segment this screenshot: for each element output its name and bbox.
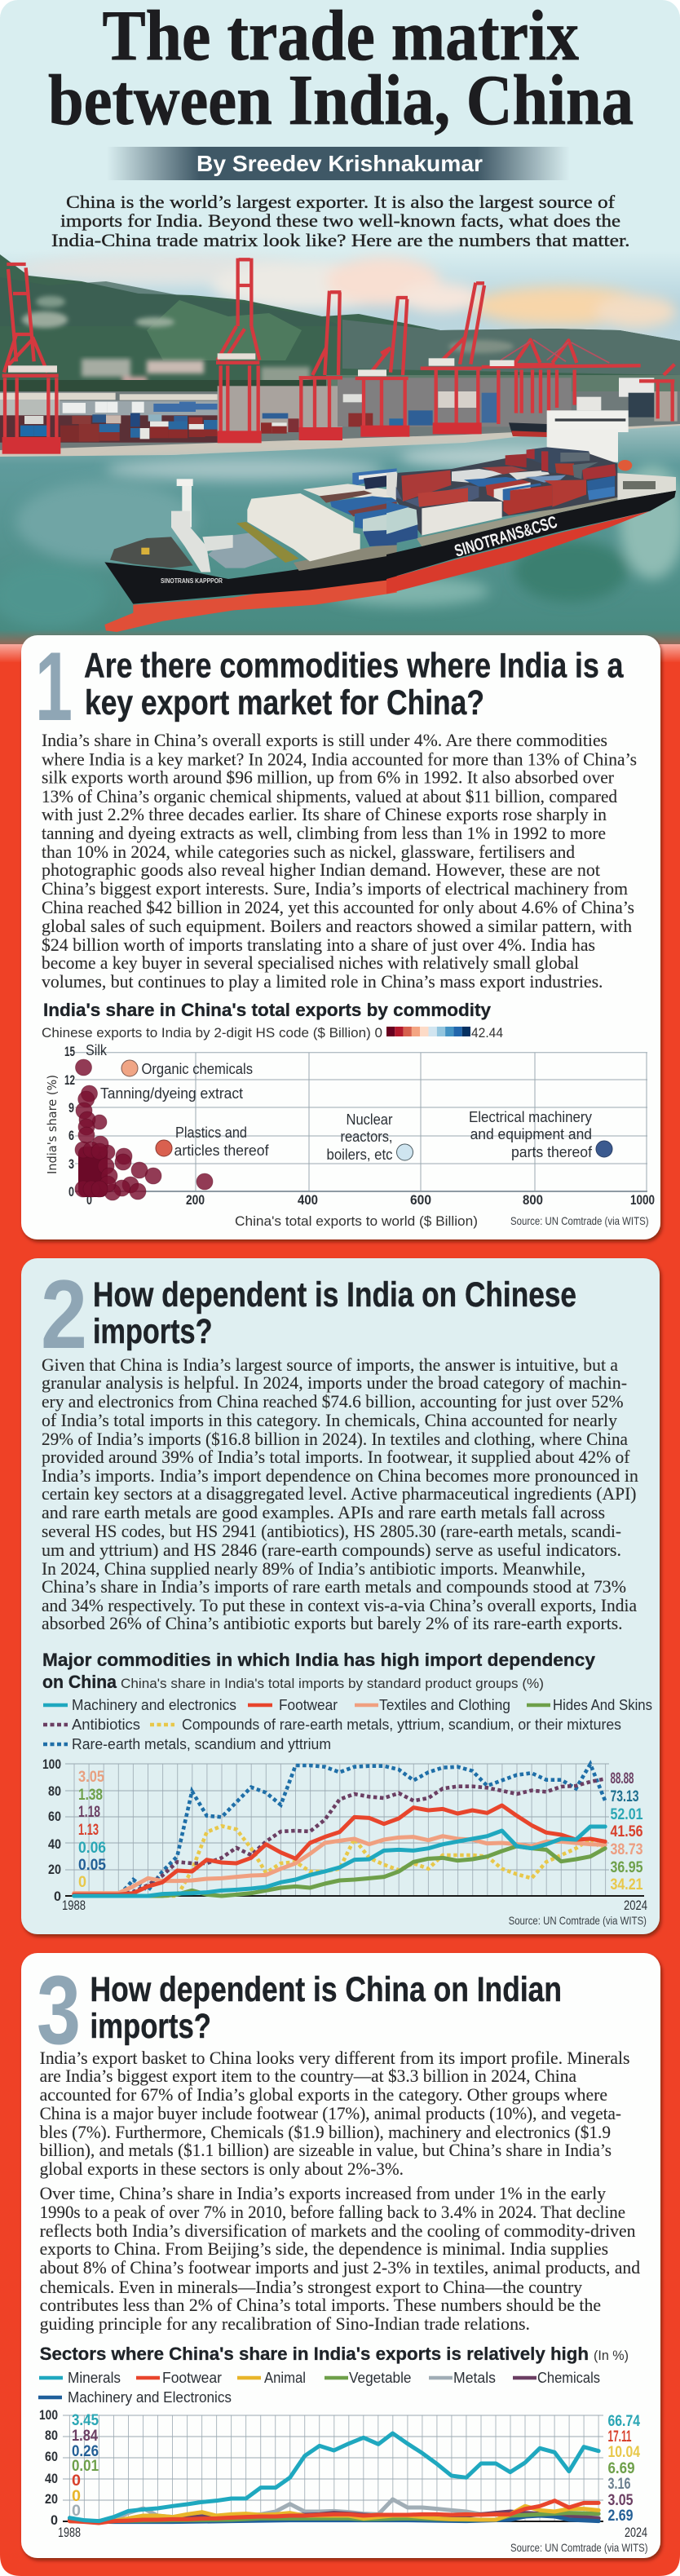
chart 2 title: on China	[42, 1672, 117, 1692]
chart 2 legend: Machinery and electronics	[72, 1697, 236, 1713]
panel 2 body text: absorbed 26% of China’s antibiotic exports but barely 2% of its rare-earth exports.	[42, 1613, 623, 1633]
chart 3 legend: Minerals	[68, 2370, 121, 2386]
panel 1 body text: global sales of such equipment. Boilers and reactors showed a similar pattern, with	[42, 916, 632, 936]
start value labels: 0.26	[72, 2443, 99, 2460]
y axis labels: 100	[39, 2407, 58, 2423]
start value labels: 0.05	[78, 1857, 106, 1874]
panel 2 body text: India’s imports. India’s import dependence on China becomes more pronounced in	[42, 1465, 638, 1486]
chart 2 legend	[43, 1697, 652, 1752]
red background	[0, 662, 680, 2576]
panel 2 heading: How dependent is India on Chinese	[93, 1275, 576, 1315]
chart 2 legend: Hides And Skins	[553, 1697, 652, 1713]
panel 1 body text	[42, 730, 637, 992]
panel 2 body text: 29% of India’s imports ($16.8 billion in 2024). In textiles and clothing, where China	[42, 1429, 628, 1449]
end value labels	[610, 1770, 643, 1893]
chart 2 legend: Compounds of rare-earth metals, yttrium, scandium, or their mixtures	[182, 1717, 621, 1733]
end value labels	[608, 2413, 640, 2525]
panel 3 background	[21, 1953, 660, 2558]
bubble labels: Nuclear	[346, 1111, 393, 1128]
x axis year labels: 1988	[62, 1898, 86, 1913]
chart 3 legend: Vegetable	[349, 2370, 411, 2386]
panel 1 heading	[84, 647, 624, 722]
y axis labels: 0	[68, 1184, 74, 1200]
mountains	[0, 254, 680, 383]
y axis labels: 3	[68, 1156, 74, 1172]
bubble labels: Plastics and	[175, 1125, 247, 1141]
y axis labels: 40	[45, 2471, 58, 2486]
end value labels: 73.13	[610, 1788, 639, 1805]
bubbles	[75, 1059, 612, 1200]
crane 3	[299, 291, 342, 435]
y axis labels: 40	[48, 1836, 61, 1852]
chart 2 title: Major commodities in which India has high import dependency	[42, 1650, 596, 1670]
red boot-top	[104, 573, 397, 632]
y axis labels: 80	[48, 1783, 61, 1799]
byline bar	[107, 147, 570, 180]
bubble labels: articles thereof	[174, 1142, 269, 1159]
start value labels	[78, 1769, 106, 1891]
cranes left	[2, 258, 342, 454]
panel 2 body text: several HS codes, but HS 2941 (antibiotics), HS 2805.30 (rare-earth metals, scandi-	[42, 1521, 621, 1541]
x axis year labels	[58, 2525, 647, 2540]
crane 7	[639, 365, 674, 422]
y axis labels: 100	[42, 1756, 61, 1772]
warehouse band and containers	[0, 393, 218, 443]
end value labels: 34.21	[610, 1876, 643, 1893]
deck band	[417, 495, 617, 546]
start value labels: 0	[72, 2472, 81, 2490]
source note: Source: UN Comtrade (via WITS)	[510, 2541, 647, 2554]
start value labels: 0	[72, 2503, 81, 2520]
y axis labels: 20	[45, 2491, 58, 2507]
town on hillside	[78, 356, 313, 380]
panel 2 body text: China’s share in India’s imports of rare earth metals and compounds stood at 73%	[42, 1576, 626, 1597]
start value labels: 1.18	[78, 1804, 100, 1821]
panel 3 heading: imports?	[90, 2007, 211, 2046]
start value labels	[72, 2412, 99, 2520]
ship name on bow: SINOTRANS KAPPPOR	[161, 577, 223, 585]
x axis labels: 1000	[630, 1192, 655, 1208]
series lines	[74, 1764, 605, 1896]
panel 1 body text: India’s share in China’s overall exports is still under 4%. Are there commodities	[42, 730, 607, 750]
y axis labels: 9	[68, 1100, 74, 1116]
y axis labels: 80	[45, 2428, 58, 2443]
panel 3 body text: contributes less than 2% of China’s total imports. These numbers should be the	[40, 2295, 601, 2315]
x axis year labels: 2024	[624, 1898, 647, 1913]
crane 1	[2, 264, 59, 447]
crane 5	[421, 283, 484, 430]
sky	[17, 259, 680, 341]
deck band	[294, 542, 397, 571]
chart 1 subtitle and colour legend: Chinese exports to India by 2-digit HS code ($ Billion) 0	[42, 1025, 382, 1041]
end value labels: 2.69	[608, 2508, 633, 2525]
panel 3 body text: are India’s biggest export item to the country—at $3.3 billion in 2024, China	[40, 2066, 576, 2086]
bubble labels: boilers, etc	[326, 1147, 393, 1163]
bubble labels	[86, 1042, 593, 1163]
end value labels: 3.16	[608, 2476, 631, 2493]
bubble labels: Tanning/dyeing extract	[100, 1085, 243, 1102]
line chart: China's share in India's exports	[39, 2407, 647, 2554]
chart 2 legend: Footwear	[279, 1697, 338, 1713]
x axis labels: 200	[186, 1192, 205, 1208]
panel 1 body text: silk exports worth around $96 million, up from 6% in 1992. It also absorbed over	[42, 767, 615, 788]
panel 3 body text: accounted for 67% of India’s global exports in the category. Other groups where	[40, 2084, 607, 2105]
panel 3 heading	[90, 1970, 562, 2046]
ship superstructure	[547, 410, 629, 432]
start value labels: 1.84	[72, 2428, 98, 2445]
panel 3 body text: guiding principle for any recalibration of Sino-Indian trade relations.	[40, 2313, 530, 2334]
y axis labels: 0	[54, 1889, 61, 1904]
y axis labels: 60	[48, 1809, 61, 1824]
intro text	[51, 192, 629, 250]
crane 6 boom	[482, 340, 641, 424]
panel 3 body text: China is a major buyer include footwear (17%), animal products (10%), and vegeta-	[40, 2103, 621, 2123]
lifeboat	[618, 460, 632, 471]
panel 1 body text: volumes, but continues to play a limited role in China’s mass export industries.	[42, 971, 603, 992]
black hull	[386, 491, 676, 579]
ship rear containers	[386, 447, 676, 594]
start value labels: 3.05	[78, 1769, 104, 1786]
panel 2 body text: and rare earth metals are good examples. APIs and rare earth metals fall across	[42, 1502, 605, 1522]
rear stack	[506, 454, 527, 467]
red containers	[396, 485, 479, 507]
y axis labels: 20	[48, 1862, 61, 1877]
container base	[396, 451, 617, 536]
panel 1: key export market	[21, 632, 660, 1239]
y axis labels: 12	[64, 1072, 75, 1088]
blue containers	[330, 496, 397, 515]
rear structure	[616, 473, 676, 500]
start value labels: 1.13	[78, 1822, 99, 1839]
chart 3 legend: Machinery and Electronics	[68, 2389, 232, 2406]
bubble labels: Organic chemicals	[142, 1061, 253, 1077]
clouds	[16, 254, 677, 328]
red boot-top	[386, 511, 650, 594]
panel 1 body text: photographic goods also reveal higher Indian demand. However, these are not	[42, 859, 600, 880]
white containers	[247, 493, 360, 561]
x axis labels	[86, 1192, 655, 1208]
series lines	[69, 2433, 598, 2523]
end value labels: 88.88	[610, 1770, 634, 1787]
end value labels: 3.05	[608, 2492, 634, 2509]
title	[48, 0, 634, 140]
bridge structure	[171, 511, 210, 572]
chart 3 title: Sectors where China's share in India's exports is relatively high	[40, 2344, 589, 2364]
panel 1 background	[21, 635, 660, 1239]
chart 3 legend	[38, 2370, 600, 2406]
panel 2 body text: ery and electronics from China reached $74.6 billion, accounting for just over 52%	[42, 1391, 623, 1412]
black hull	[104, 553, 397, 604]
start value labels: 0	[78, 1874, 86, 1891]
rear tug	[509, 422, 547, 436]
panel 3 body text: exports to China. From Beijing’s side, the dependence is minimal. India supplies	[40, 2238, 608, 2259]
chart 2 legend: Textiles and Clothing	[379, 1697, 510, 1713]
panel 3 body text: bles (7%). Furthermore, Chemicals ($1.9 billion), machinery and electronics ($1.9	[40, 2122, 611, 2142]
photo fade into red	[0, 630, 680, 663]
source note: Source: UN Comtrade (via WITS)	[510, 1214, 649, 1227]
chart 2 legend: Rare-earth metals, scandium and yttrium	[72, 1736, 331, 1752]
dock yard	[0, 391, 680, 450]
end value labels: 17.11	[608, 2428, 632, 2446]
crane 2	[216, 258, 259, 435]
panel 2 body text: of India’s total imports in this category. In chemicals, China accounted for nearly	[42, 1410, 617, 1430]
chart 2 title	[42, 1650, 596, 1692]
panel 2 heading	[93, 1275, 576, 1351]
x axis labels: 800	[523, 1192, 543, 1208]
panel 1 body text: become a key buyer in several specialised niches with relatively small global	[42, 952, 579, 973]
panel 1 body text: $24 billion worth of imports translating into a share of just over 4%. India has	[42, 935, 595, 955]
photo: container port and cargo ship	[0, 251, 680, 644]
chart 1 title: India's share in China's total exports by commodity	[43, 1000, 492, 1020]
panel 1 body text: 13% of China’s organic chemical shipments, valued at about $11 billion, compared	[42, 786, 617, 806]
start value labels: 3.45	[72, 2412, 99, 2429]
panel 2 heading: imports?	[93, 1312, 212, 1351]
white containers	[422, 502, 502, 536]
panel 2 body text: and 34% respectively. To put these in context vis-a-via China’s overall exports, India	[42, 1595, 637, 1615]
y axis labels	[42, 1756, 61, 1904]
intro text: imports for India. Beyond these two well-known facts, what does the	[60, 210, 620, 231]
panel 2 body text: um and yttrium) and HS 2846 (rare-earth compounds) serve as useful indicators.	[42, 1540, 621, 1560]
bubble labels: Electrical machinery	[469, 1109, 592, 1125]
panel 1 body text: than 10% in 2024, while categories such as nickel, glassware, fertilisers and	[42, 842, 575, 862]
x axis year labels: 2024	[625, 2525, 647, 2540]
end value labels: 52.01	[610, 1806, 643, 1823]
start value labels: 0.01	[72, 2458, 99, 2475]
panel 2 body text: In 2024, China supplied nearly 89% of India’s antibiotic imports. Meanwhile,	[42, 1558, 585, 1579]
line chart: China's share in India's imports	[42, 1756, 647, 1927]
panel 1 heading: key export market for China?	[85, 683, 484, 722]
water	[0, 426, 680, 644]
panel 2 number: 2	[41, 1260, 87, 1369]
end value labels: 10.04	[608, 2444, 640, 2461]
x axis labels: 400	[298, 1192, 318, 1208]
header background	[0, 0, 680, 277]
panel 3 body text: India’s export basket to China looks very different from its import profile. Minerals	[40, 2048, 630, 2068]
chart 3 legend: Footwear	[162, 2370, 222, 2386]
chart 2 legend: Antibiotics	[72, 1717, 140, 1733]
panel 2 body text: granular analysis is helpful. In 2024, imports under the broad category of machin-	[42, 1372, 627, 1393]
chart 1 subtitle and colour legend: 42.44	[471, 1025, 503, 1041]
bubble labels: and equipment and	[470, 1126, 592, 1142]
panel 3 body text: about 8% of China’s footwear imports and just 2-3% in textiles, animal products, and	[40, 2257, 640, 2278]
start value labels: 0.06	[78, 1840, 106, 1857]
front-left containers	[386, 502, 417, 536]
panel 3 body text: chemicals. Even in minerals—India’s strongest export to China—the country	[40, 2277, 582, 2297]
panel 3 heading: How dependent is China on Indian	[90, 1970, 562, 2009]
panel 1 body text: China reached $42 billion in 2024, yet this accounted for only about 4.6% of China’s	[42, 897, 634, 917]
bow deck	[110, 537, 193, 568]
panel 1 body text: with just 2.2% three decades earlier. Its share of Chinese exports rose sharply in	[42, 804, 607, 824]
panel 3 body text: global exports in these sectors is only about 2%-3%.	[40, 2158, 404, 2179]
byline bar: By Sreedev Krishnakumar	[196, 151, 483, 176]
end value labels: 66.74	[608, 2413, 640, 2430]
end value labels: 36.95	[610, 1859, 643, 1876]
chart 3 title: (In %)	[594, 2348, 629, 2363]
panel 3 body text: 1990s to a peak of over 7% in 2010, before falling back to 3.4% in 2024. That decline	[40, 2202, 625, 2222]
panel 3: China's dependence on Indian imports	[21, 1953, 660, 2558]
bubble labels: parts thereof	[511, 1144, 593, 1160]
chart 3 legend: Metals	[453, 2370, 496, 2386]
panel 2 body text: Given that China is India’s largest source of imports, the answer is intuitive, but a	[42, 1354, 618, 1375]
panel 1 number: 1	[35, 632, 73, 741]
y axis labels: 0	[51, 2512, 58, 2528]
panel 2: India's dependence on Chinese imports	[21, 1258, 660, 1934]
panel 3 body text	[40, 2048, 640, 2334]
chart 3 legend: Animal	[264, 2370, 306, 2386]
y axis title: India's share (%)	[45, 1075, 60, 1174]
dark vegetation band	[0, 380, 326, 391]
bubble chart: India's share vs China's total exports	[45, 1042, 655, 1229]
x axis year labels	[62, 1898, 647, 1913]
panel 3 body text: Over time, China’s share in India’s exports increased from under 1% in the early	[40, 2183, 606, 2203]
panel 2 body text: certain key sectors at a disaggregated level. Active pharmaceutical ingredients (API)	[42, 1483, 636, 1504]
panel 3 number: 3	[37, 1955, 81, 2065]
panel 2 body text	[42, 1354, 638, 1633]
ship name on hull: SINOTRANS&CSC	[453, 513, 559, 561]
y axis labels: 15	[64, 1044, 75, 1059]
bubble labels: reactors,	[341, 1129, 393, 1145]
y axis labels	[39, 2407, 58, 2528]
bubble labels: Silk	[86, 1042, 108, 1058]
hatch	[208, 532, 277, 568]
start value labels: 0	[72, 2488, 81, 2505]
y axis labels: 60	[45, 2449, 58, 2464]
y axis labels	[64, 1044, 75, 1200]
x axis labels: 600	[410, 1192, 431, 1208]
chart 2 title: China's share in India's total imports by standard product groups (%)	[121, 1676, 544, 1691]
chart 3 legend: Chemicals	[537, 2370, 600, 2386]
end value labels: 41.56	[610, 1823, 642, 1840]
panel 1 body text: where India is a key market? In 2024, India accounted for more than 13% of China’s	[42, 749, 637, 769]
y axis labels: 6	[68, 1128, 74, 1143]
mast	[182, 481, 192, 528]
intro text: India-China trade matrix look like? Here are the numbers that matter.	[51, 230, 629, 250]
start value labels: 1.38	[78, 1787, 103, 1804]
x axis year labels: 1988	[58, 2525, 81, 2540]
x axis labels: 0	[86, 1192, 92, 1208]
ship hull front and deck	[104, 468, 397, 632]
panel 3 body text: billion), and metals ($1.1 billion) are sizeable in value, but China’s share in India’s	[40, 2140, 612, 2160]
end value labels: 38.73	[610, 1841, 642, 1858]
intro text: China is the world’s largest exporter. It is also the largest source of	[66, 192, 616, 212]
panel 2 body text: provided around 39% of India’s total imports. In footwear, it supplied about 42% of	[42, 1447, 630, 1467]
end value labels: 6.69	[608, 2460, 634, 2477]
panel 3 body text: reflects both India’s diversification of markets and the cooling of commodity-driven	[40, 2220, 636, 2241]
x axis title: China's total exports to world ($ Billion)	[235, 1213, 478, 1229]
panel 1 body text: China’s biggest export interests. Sure, India’s imports of electrical machinery from	[42, 878, 628, 899]
source note: Source: UN Comtrade (via WITS)	[509, 1914, 647, 1927]
crane 4	[355, 296, 408, 432]
panel 2 background	[21, 1258, 660, 1934]
cranes right	[355, 283, 674, 462]
quay	[0, 424, 680, 457]
panel 1 body text: tanning and dyeing extracts as well, climbing from less than 1% in 1992 to more	[42, 823, 606, 843]
